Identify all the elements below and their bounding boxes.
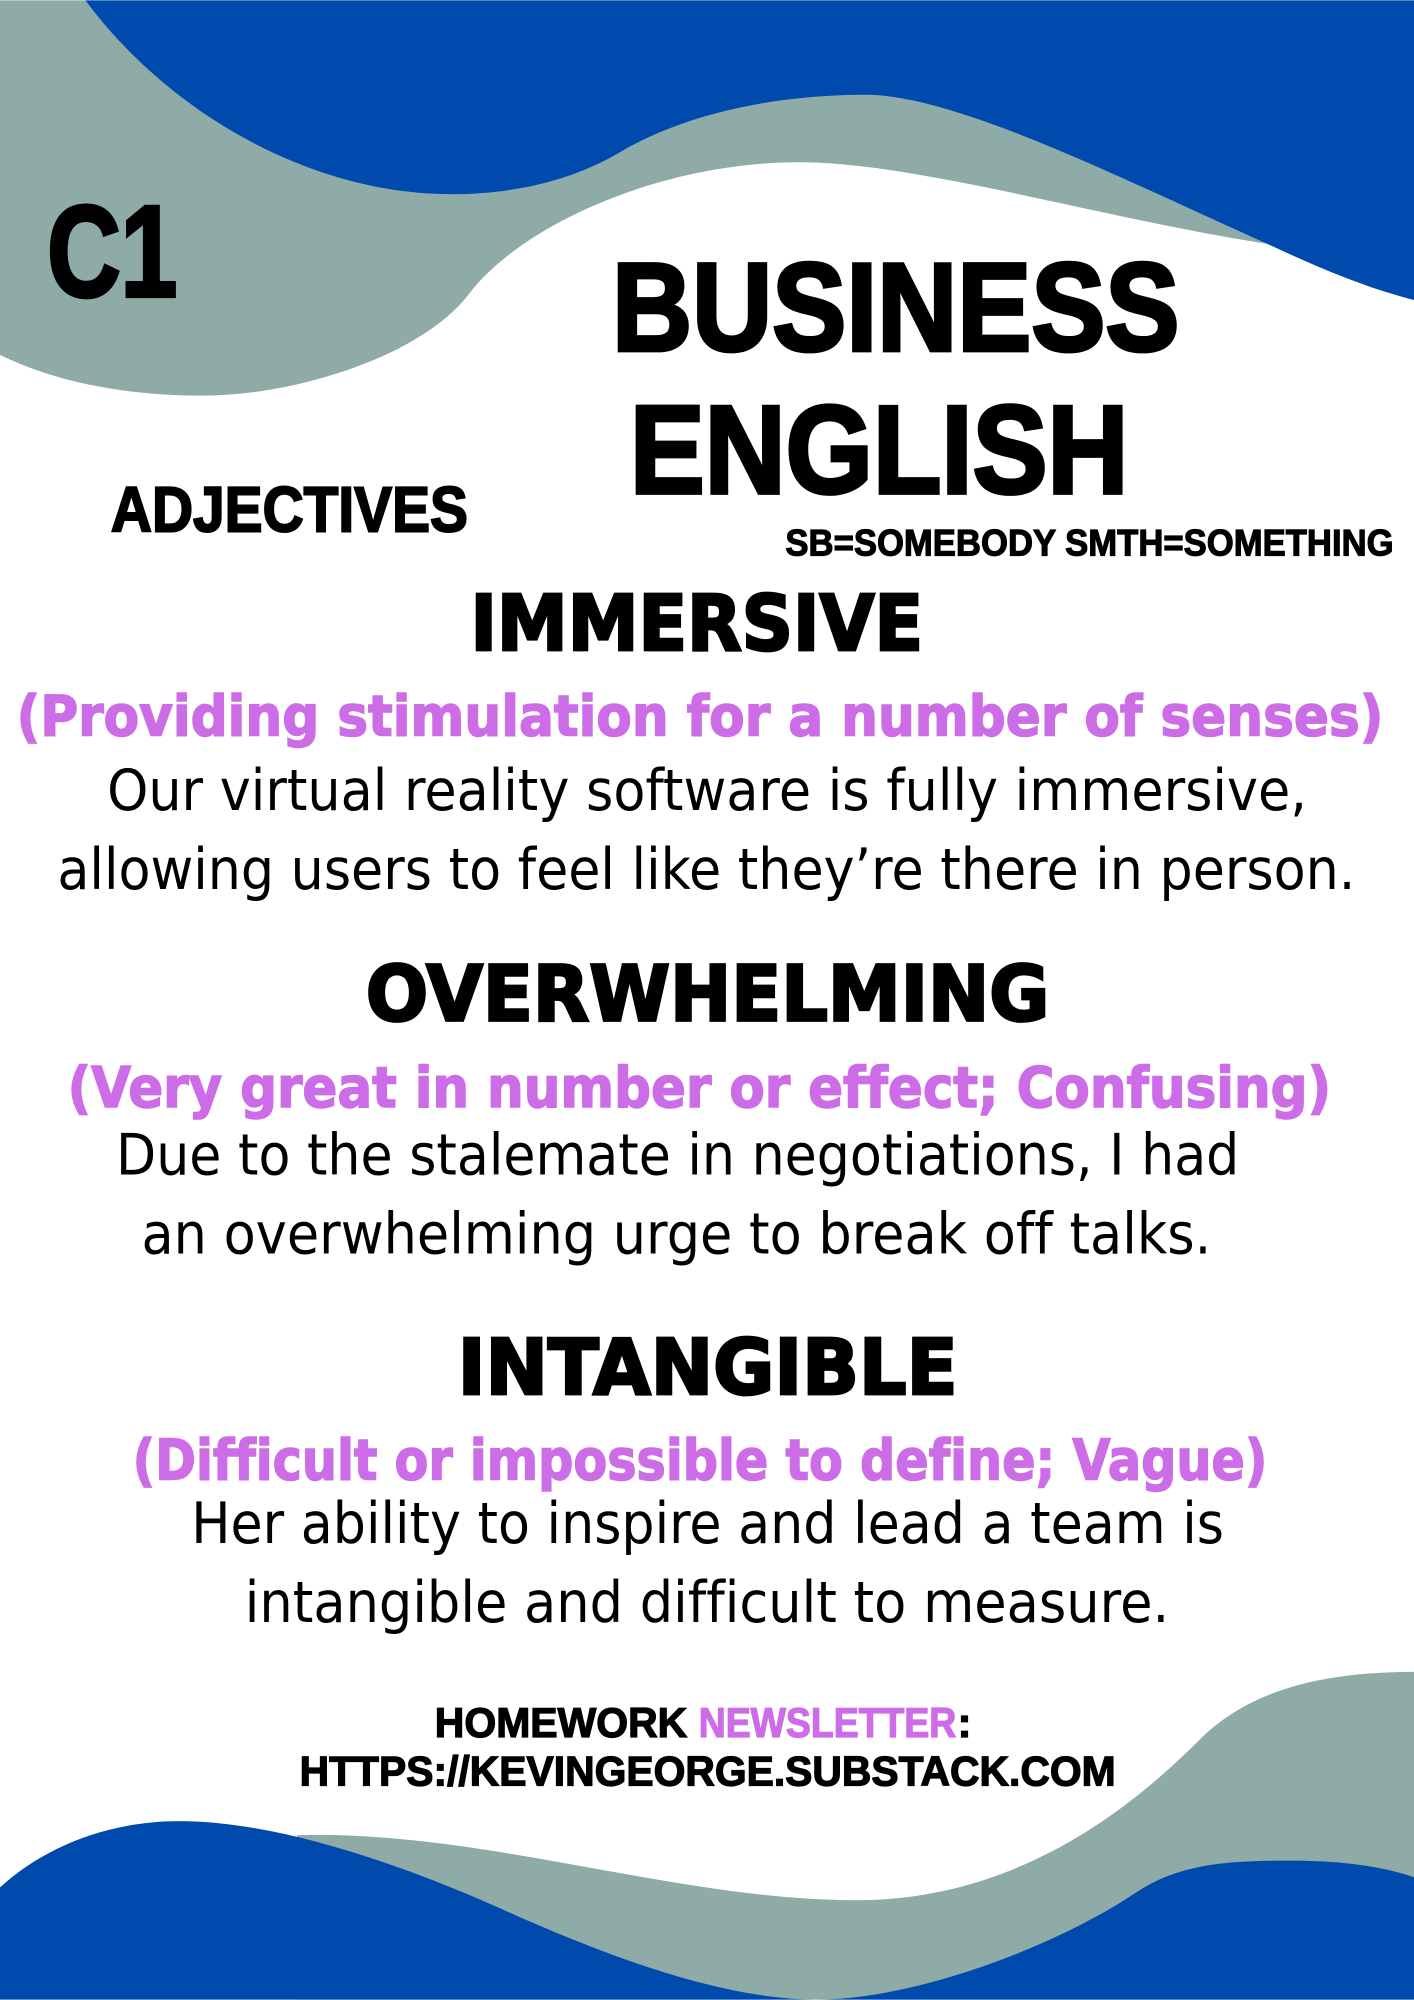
word heading: OVERWHELMING xyxy=(366,950,1049,1039)
example sentence xyxy=(57,757,1355,903)
example sentence: Our virtual reality software is fully immersive, xyxy=(107,757,1307,824)
top blue wave xyxy=(85,0,1414,300)
example sentence xyxy=(191,1490,1224,1636)
bottom gray wave xyxy=(297,1672,1414,2000)
example sentence: Due to the stalemate in negotiations, I had xyxy=(116,1122,1239,1189)
panel: intangible xyxy=(133,1324,1267,1636)
footer: homework newsletter link: : xyxy=(958,1699,972,1746)
title line 1: BUSINESS xyxy=(612,238,1179,377)
panel: immersive xyxy=(17,580,1383,903)
panel: overwhelming xyxy=(68,950,1331,1268)
example sentence: an overwhelming urge to break off talks. xyxy=(142,1201,1211,1268)
bottom blue wave xyxy=(0,1821,1414,2000)
top gray wave xyxy=(0,0,1414,396)
subtitle: adjectives: ADJECTIVES xyxy=(111,473,468,545)
example sentence: Her ability to inspire and lead a team is xyxy=(191,1490,1224,1557)
level badge: C1: C1 xyxy=(47,178,177,324)
word heading: INTANGIBLE xyxy=(458,1324,958,1413)
title xyxy=(612,238,1179,520)
definition: (Difficult or impossible to define; Vague) xyxy=(133,1428,1267,1493)
example sentence: intangible and difficult to measure. xyxy=(245,1569,1169,1636)
title line 2: ENGLISH xyxy=(630,381,1128,520)
footer: homework newsletter link: HOMEWORK xyxy=(435,1699,687,1746)
footer: homework newsletter link: NEWSLETTER xyxy=(699,1699,956,1746)
footer: homework newsletter link: HTTPS://KEVINGEORGE.SUBSTACK.COM xyxy=(300,1747,1116,1794)
example sentence xyxy=(116,1122,1239,1268)
definition: (Very great in number or effect; Confusing) xyxy=(68,1056,1331,1121)
word heading: IMMERSIVE xyxy=(470,580,923,669)
footer: homework newsletter link xyxy=(300,1699,1116,1794)
